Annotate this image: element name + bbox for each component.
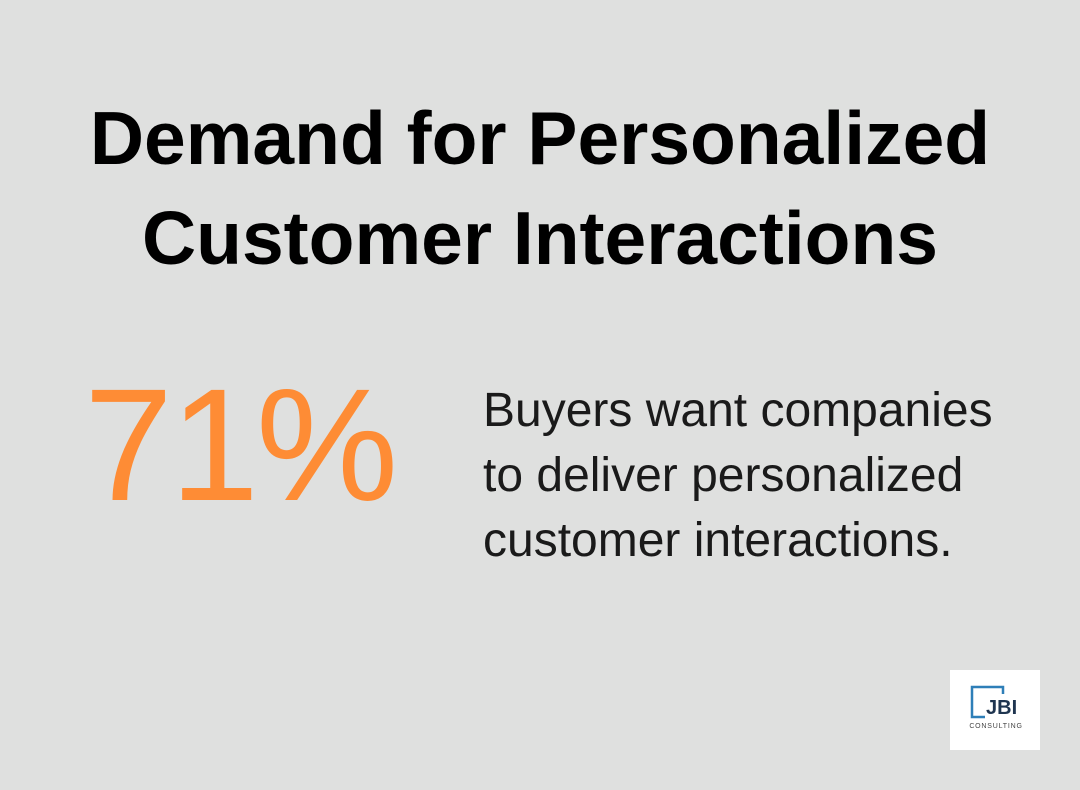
- logo: JBI Consulting: JBI: [986, 697, 1017, 719]
- description: to deliver personalized: [483, 449, 963, 502]
- description: [483, 384, 993, 567]
- title: Demand for Personalized: [90, 96, 990, 180]
- description: Buyers want companies: [483, 384, 993, 437]
- description: customer interactions.: [483, 514, 953, 567]
- logo: JBI Consulting: CONSULTING: [969, 723, 1023, 730]
- title: Customer Interactions: [142, 196, 938, 280]
- title: [90, 96, 990, 280]
- logo: JBI Consulting: [950, 670, 1040, 750]
- stat: 71%: 71%: [84, 355, 395, 534]
